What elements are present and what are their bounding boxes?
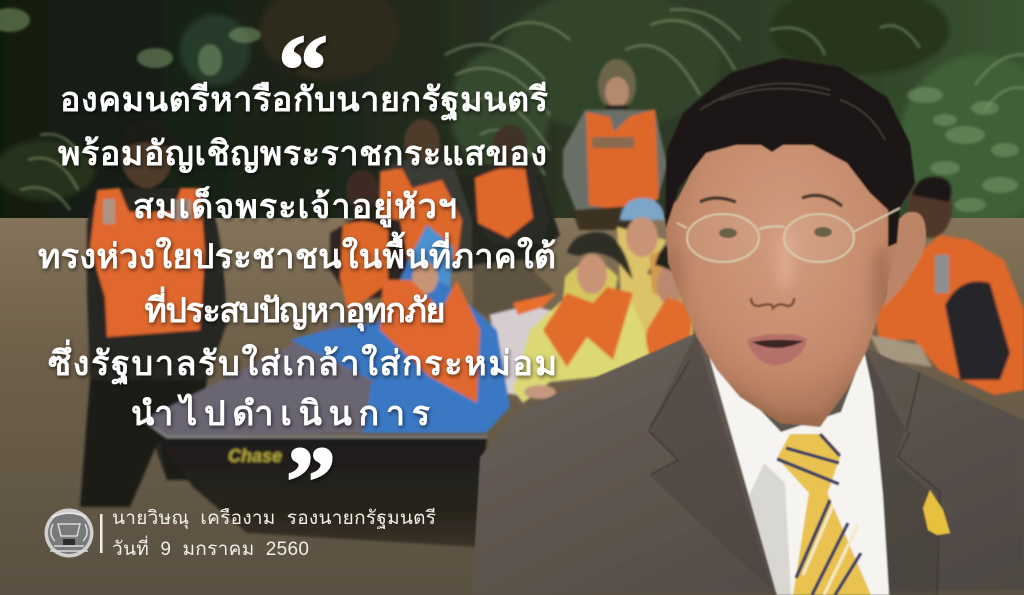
opening quotation mark: “ [278,14,328,125]
line 5: ที่ประสบปัญหาอุทกภัย [144,286,445,332]
line 3: สมเด็จพระเจ้าอยู่หัวฯ [133,185,457,228]
face shading [669,241,892,427]
palm fronds [20,9,1024,210]
man right in life vest [870,177,1024,395]
line 1: องคมนตรีหารือกับนายกรัฐมนตรี [60,81,549,122]
shirt [709,351,889,595]
divider [100,514,102,553]
passenger in blue raincoat [290,225,510,433]
speaker name: นายวิษณุ เครืองาม รองนายกรัฐมนตรี [112,507,436,530]
crew behind [330,119,560,313]
women in raincoats [513,198,693,403]
main portrait: man in grey suit [472,58,1024,595]
lapel shading [648,333,939,595]
closing quotation mark: ” [286,426,336,537]
tie [777,434,871,595]
government seal icon [44,508,94,558]
speaker credit [112,507,436,560]
boat hull [143,420,487,547]
line 2: พร้อมอัญเชิญพระราชกระแสของ [58,135,547,174]
date: วันที่ 9 มกราคม 2560 [112,535,309,560]
man standing left [80,120,227,507]
suit [472,333,1024,595]
rescue team in boat [80,59,693,547]
flood water [0,218,1024,595]
boat interior [143,320,373,437]
lapel pin [923,490,950,535]
quote text [38,14,557,537]
line 7: นำไปดำเนินการ [131,393,431,433]
standing woman with hijab [563,59,667,230]
jungle [0,0,1024,230]
line 6: ซึ่งรัฐบาลรับใส่เกล้าใส่กระหม่อม [48,339,557,386]
eyebrows, eyes, nose and mouth [700,195,842,206]
glasses [677,208,900,262]
foliage patches [0,8,1019,212]
camo bags and white bundle [473,260,560,398]
boat brand: Chase [228,446,282,466]
hair [665,58,915,247]
line 4: ทรงห่วงใยประชาชนในพื้นที่ภาคใต้ [38,231,556,276]
ear [884,212,926,308]
face and neck [665,113,897,427]
